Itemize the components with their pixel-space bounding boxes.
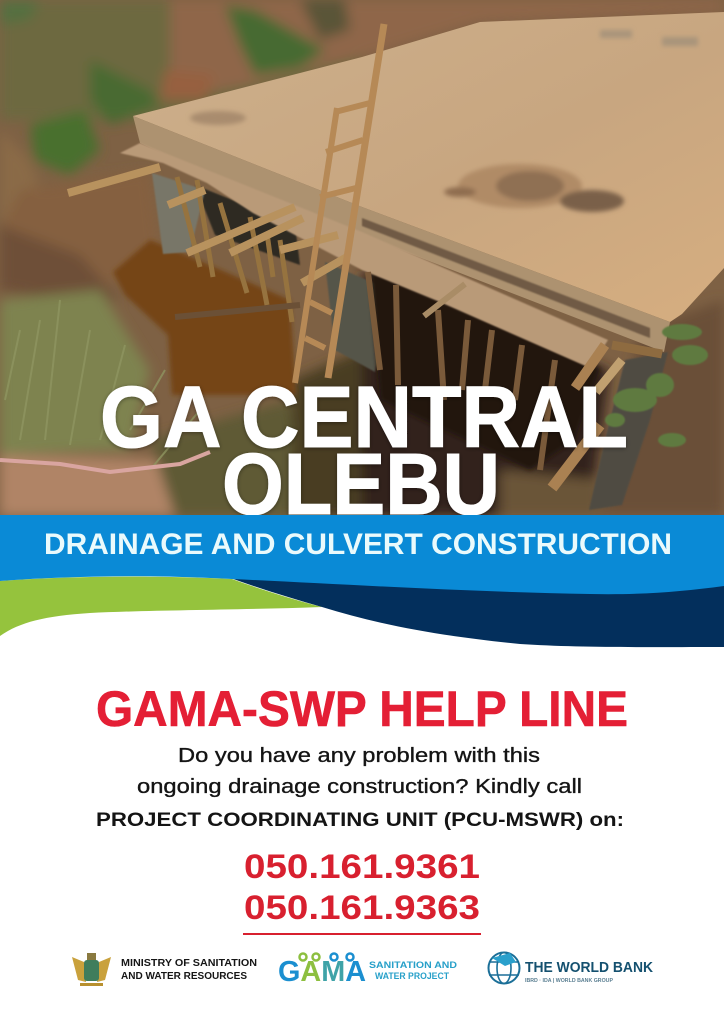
- timber planks: [68, 167, 662, 488]
- banner: blue band: [0, 515, 724, 594]
- helpline text: PROJECT COORDINATING UNIT (PCU-MSWR) on:: [96, 810, 624, 831]
- stains: [190, 30, 698, 212]
- abutment wall: [589, 352, 668, 510]
- wave: navy: [225, 576, 724, 647]
- white lower page: [0, 575, 724, 1024]
- photo: culvert construction site: [0, 0, 724, 516]
- tape on ground: [0, 452, 210, 472]
- World Bank name: IBRD · IDA | WORLD BANK GROUP: [525, 978, 613, 984]
- helpline text: Do you have any problem with this: [178, 745, 540, 767]
- red rule: [243, 933, 481, 935]
- helpline text: [96, 745, 624, 831]
- ministry name: AND WATER RESOURCES: [121, 971, 247, 982]
- slab top: [133, 12, 724, 322]
- foliage right: [605, 324, 708, 447]
- ladder: [295, 24, 384, 383]
- phone numbers: [244, 848, 480, 927]
- title: GA CENTRAL OLEBU: OLEBU: [222, 436, 500, 533]
- World Bank name: THE WORLD BANK: [525, 960, 653, 976]
- GAMA project name: WATER PROJECT: [375, 971, 449, 982]
- World Bank name: [525, 960, 653, 984]
- phone numbers: 050.161.9361: [244, 848, 480, 886]
- banner heading: DRAINAGE AND CULVERT CONSTRUCTION: [44, 528, 672, 561]
- helpline heading: GAMA-SWP HELP LINE: [96, 681, 628, 737]
- wave: green: [0, 577, 322, 636]
- dark bay under slab: [370, 270, 600, 470]
- helpline text: ongoing drainage construction? Kindly call: [137, 776, 582, 798]
- title: GA CENTRAL OLEBU: [100, 369, 628, 533]
- logo: GAMA: GAMA: [278, 956, 366, 988]
- title: GA CENTRAL OLEBU: GA CENTRAL: [100, 369, 628, 466]
- logo: GAMA figures heads: [300, 954, 354, 960]
- ministry name: MINISTRY OF SANITATION: [121, 958, 257, 969]
- props under slab: [368, 272, 555, 470]
- pier: [152, 173, 205, 254]
- grass lower left: [5, 300, 200, 470]
- props in water: [175, 177, 300, 322]
- slab fascia: [133, 116, 670, 352]
- shadow under slab, left bay: [195, 185, 300, 265]
- GAMA project name: [369, 960, 457, 982]
- ministry name: [121, 958, 257, 982]
- water: [113, 240, 296, 395]
- GAMA project name: SANITATION AND: [369, 960, 457, 971]
- logo: World Bank globe: [488, 952, 520, 984]
- rough beam: [120, 143, 608, 368]
- logo: ministry coat of arms: [72, 953, 111, 986]
- phone numbers: 050.161.9363: [244, 889, 480, 927]
